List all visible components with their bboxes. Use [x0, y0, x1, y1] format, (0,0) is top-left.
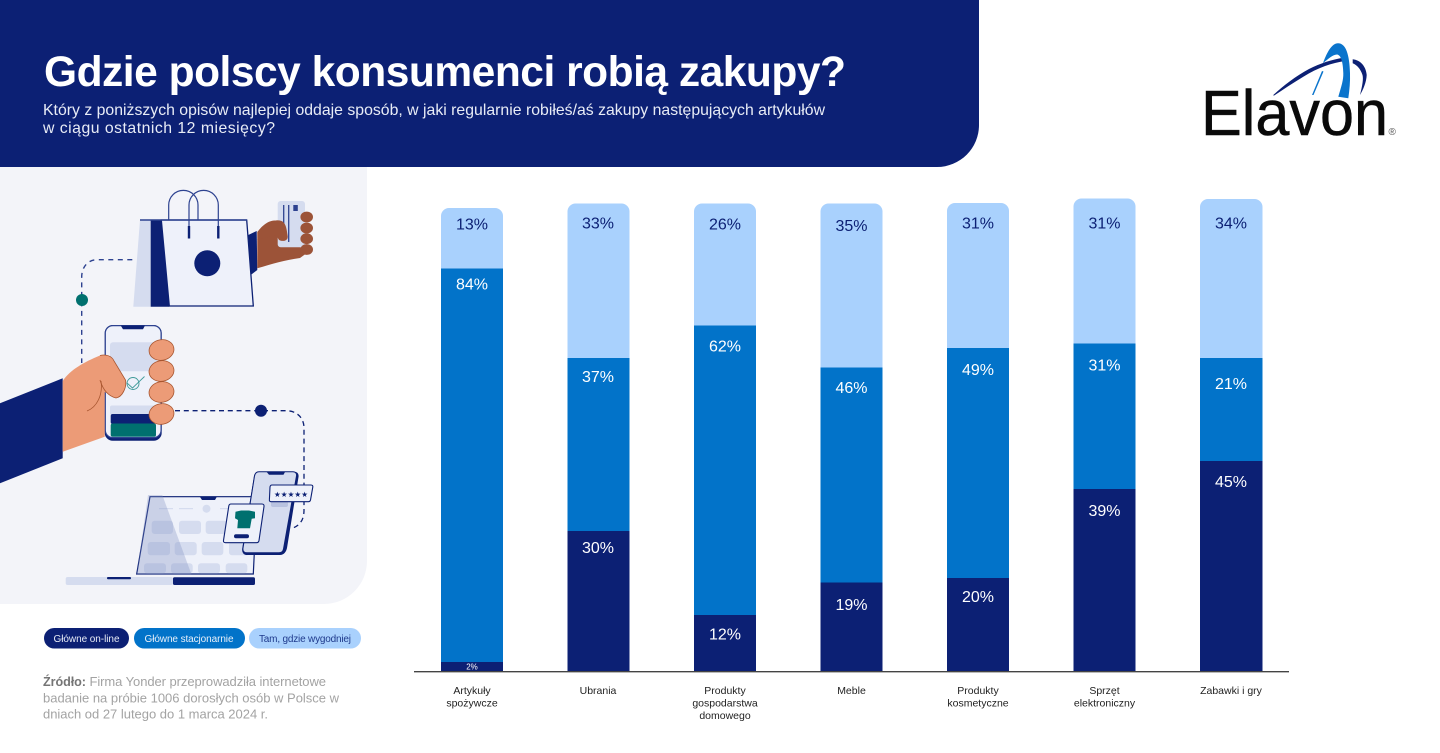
category labels: gospodarstwa: [692, 698, 758, 710]
bar: Ubrania: 37%: [582, 369, 614, 386]
category labels: Meble: [837, 685, 866, 697]
bar: Produkty gospodarstwa domowego: 26%: [709, 216, 741, 234]
category labels: domowego: [699, 710, 751, 722]
category labels: [446, 685, 1263, 722]
legend: mainly in store: Główne stacjonarnie: [144, 634, 234, 645]
icon: smartphone: [105, 325, 162, 441]
source note: dniach od 27 lutego do 1 marca 2024 r.: [43, 706, 268, 722]
bar: Meble: 35%: [835, 218, 868, 235]
category labels: kosmetyczne: [947, 698, 1009, 710]
bar: Sprzęt elektroniczny: 31%: [1088, 358, 1121, 374]
bar: Artykuły spożywcze: 84%: [456, 277, 488, 294]
category labels: Ubrania: [580, 685, 617, 697]
legend: wherever convenient: Tam, gdzie wygodniej: [259, 634, 351, 645]
category labels: Produkty: [957, 685, 999, 697]
bar: Sprzęt elektroniczny: 31%: [1088, 216, 1121, 232]
logo: Elavon: [1201, 43, 1396, 149]
icon: t-shirt card: [223, 504, 264, 543]
bar: Zabawki i gry: [1200, 199, 1262, 672]
title: Gdzie polscy konsumenci robią zakupy?: [44, 49, 846, 96]
bar: Zabawki i gry: 45%: [1215, 474, 1247, 491]
bar: Produkty kosmetyczne: 31%: [962, 216, 994, 232]
icon: second phone: [242, 472, 299, 555]
icon: laptop: [66, 495, 257, 585]
legend: mainly in store: [134, 628, 245, 648]
icon: shopping bag: [133, 190, 253, 307]
category labels: elektroniczny: [1074, 698, 1136, 710]
bar: Produkty gospodarstwa domowego: 62%: [709, 338, 741, 356]
header banner: [0, 0, 979, 167]
bar: Zabawki i gry: 34%: [1215, 216, 1247, 232]
bar: Produkty kosmetyczne: 49%: [962, 362, 994, 379]
bar: Ubrania: 30%: [582, 540, 614, 557]
legend: mainly online: Główne on-line: [54, 634, 120, 645]
panel: illustration: [0, 167, 367, 604]
source note: [43, 674, 340, 722]
subtitle: [42, 102, 826, 137]
icon: hand holding phone: [0, 338, 176, 483]
icon: rating card: ★★★★★: [274, 490, 308, 499]
bar: Meble: 46%: [835, 380, 868, 397]
legend: [44, 628, 361, 648]
bar: Ubrania: 33%: [582, 216, 614, 232]
logo: Elavon: Elavon: [1201, 77, 1388, 149]
bar: Artykuły spożywcze: 2%: [466, 662, 478, 672]
bar: Meble: [820, 204, 882, 672]
bar: Ubrania: [568, 204, 630, 672]
bar: Produkty gospodarstwa domowego: [694, 204, 756, 672]
bar: Produkty kosmetyczne: 20%: [962, 589, 994, 606]
stacked bar chart: [414, 198, 1289, 722]
category labels: Produkty: [704, 685, 746, 697]
connector: phone to laptop: [175, 405, 304, 528]
bar: Produkty gospodarstwa domowego: 12%: [709, 626, 741, 644]
source note: Źródło: Firma Yonder przeprowadziła internetowe: [43, 674, 326, 689]
legend: wherever convenient: [249, 628, 361, 648]
category labels: Zabawki i gry: [1200, 685, 1263, 697]
legend: mainly online: [44, 628, 129, 648]
connector: bag to phone: [76, 260, 132, 363]
icon: rating card: [269, 485, 313, 507]
bar: Meble: 19%: [835, 597, 868, 614]
source note: badanie na próbie 1006 dorosłych osób w Polsce w: [43, 690, 340, 706]
category labels: spożywcze: [446, 698, 498, 710]
icon: check mark: [127, 376, 144, 390]
logo: Elavon: ®: [1388, 127, 1396, 138]
bar: Zabawki i gry: 21%: [1215, 376, 1247, 393]
subtitle: Który z poniższych opisów najlepiej oddaje sposób, w jaki regularnie robiłeś/aś zakupy następujących artykułów: [43, 102, 826, 119]
category labels: Sprzęt: [1089, 685, 1120, 697]
bar: Sprzęt elektroniczny: [1074, 198, 1136, 672]
bar: Artykuły spożywcze: [441, 208, 503, 672]
bar: Artykuły spożywcze: 13%: [456, 216, 488, 234]
bar: Produkty kosmetyczne: [947, 203, 1009, 672]
subtitle: w ciągu ostatnich 12 miesięcy?: [42, 120, 275, 137]
icon: hand holding card: [248, 201, 313, 275]
category labels: Artykuły: [453, 685, 491, 697]
bar: Sprzęt elektroniczny: 39%: [1088, 503, 1121, 520]
